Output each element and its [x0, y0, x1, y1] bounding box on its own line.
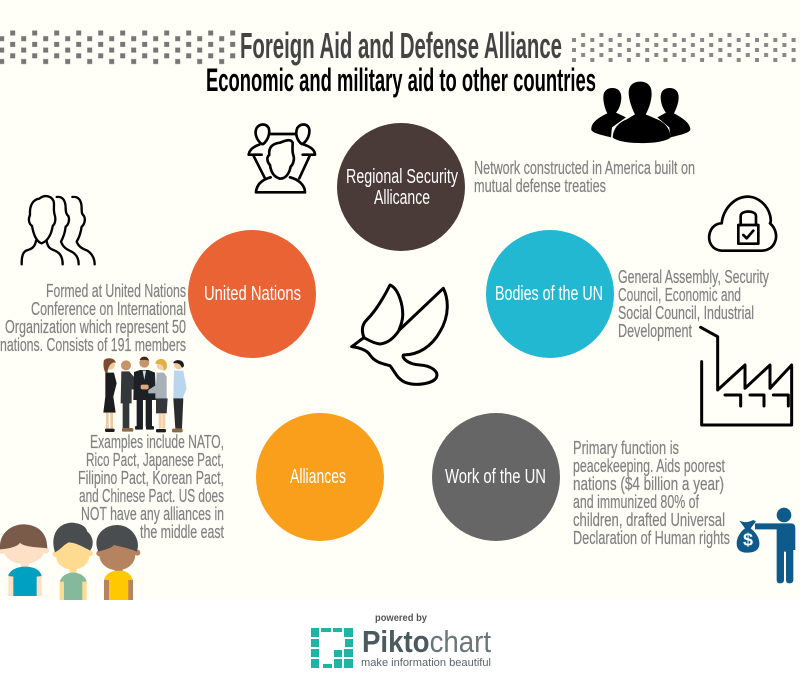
circle: Alliances: Alliances [290, 466, 346, 488]
logo mark [311, 628, 353, 668]
illustration: three children [0, 523, 140, 600]
text: alliances description: Filipino Pact, Korean Pact, [78, 468, 224, 488]
circle: Bodies of the UN [486, 230, 614, 358]
icon: factory [701, 327, 792, 425]
figure: child in green shirt [53, 523, 93, 600]
icon: business people shaking hands [103, 357, 187, 432]
figure: bald man [121, 360, 142, 432]
text: United Nations description: Conference on International [31, 299, 186, 319]
icon: three people linked [249, 124, 315, 192]
text: bodies of the UN description: Council, Economic and [618, 285, 741, 305]
text: work of the UN description: and immunized 80% of [573, 492, 700, 512]
circle: United Nations [188, 230, 316, 358]
circle: United Nations: United Nations [204, 283, 301, 305]
text: regional security description: mutual defense treaties [474, 176, 606, 196]
icon: three people outline [22, 196, 95, 264]
text: bodies of the UN description: Development [618, 321, 692, 341]
text: work of the UN description: nations ($4 billion a year) [573, 474, 724, 494]
icon: cloud with lock [709, 197, 776, 251]
wordmark: Piktochart [362, 624, 491, 659]
circle: Regional Security Alliance [337, 123, 465, 251]
text: alliances description: and Chinese Pact. US does [79, 486, 224, 506]
figure: man in blue shirt [172, 360, 187, 432]
figure: child in yellow shirt [96, 525, 140, 600]
text: regional security description: Network constructed in America built on [474, 158, 695, 178]
text: bodies of the UN description [618, 267, 769, 341]
text: work of the UN description: Declaration of Human rights [573, 528, 730, 548]
text: powered by: powered by [375, 612, 427, 624]
circle: Regional Security Alliance: Allicance [374, 187, 430, 209]
text: work of the UN description: Primary function is [573, 438, 679, 458]
text: alliances description [78, 432, 224, 542]
text: work of the UN description: children, drafted Universal [573, 510, 725, 530]
text: work of the UN description [573, 438, 730, 548]
figure: blonde woman [148, 359, 168, 432]
figure: child in blue shirt [0, 524, 49, 596]
figure: centre man [133, 357, 156, 430]
text: United Nations description: Formed at United Nations [46, 281, 186, 301]
circle: Work of the UN [432, 413, 560, 541]
text: United Nations description: Organization which represent 50 [5, 317, 186, 337]
text: United Nations description: nations. Consists of 191 members [0, 335, 186, 355]
circle: Work of the UN: Work of the UN [445, 466, 546, 488]
text: United Nations description [0, 281, 186, 355]
figure: woman in black [103, 358, 117, 432]
text: regional security description [474, 158, 695, 196]
circle: Alliances [256, 413, 384, 541]
text: alliances description: Rico Pact, Japanese Pact, [86, 450, 224, 470]
text: alliances description: Examples include NATO, [90, 432, 224, 452]
text: work of the UN description: peacekeeping. Aids poorest [573, 456, 725, 476]
icon: man with money bag: $ [743, 530, 753, 550]
text: alliances description: the middle east [140, 522, 224, 542]
icon: three people solid [591, 82, 690, 143]
text: alliances description: NOT have any alliances in [81, 504, 224, 524]
footer: Piktochart branding [311, 612, 491, 669]
title: Foreign Aid and Defense Alliance [240, 25, 562, 66]
circle: Bodies of the UN: Bodies of the UN [495, 283, 603, 305]
circle: Regional Security Alliance: Regional Security [346, 166, 458, 188]
tagline: make information beautiful [361, 657, 491, 669]
icon: man with money bag [737, 508, 795, 583]
icon: dove [352, 285, 447, 384]
